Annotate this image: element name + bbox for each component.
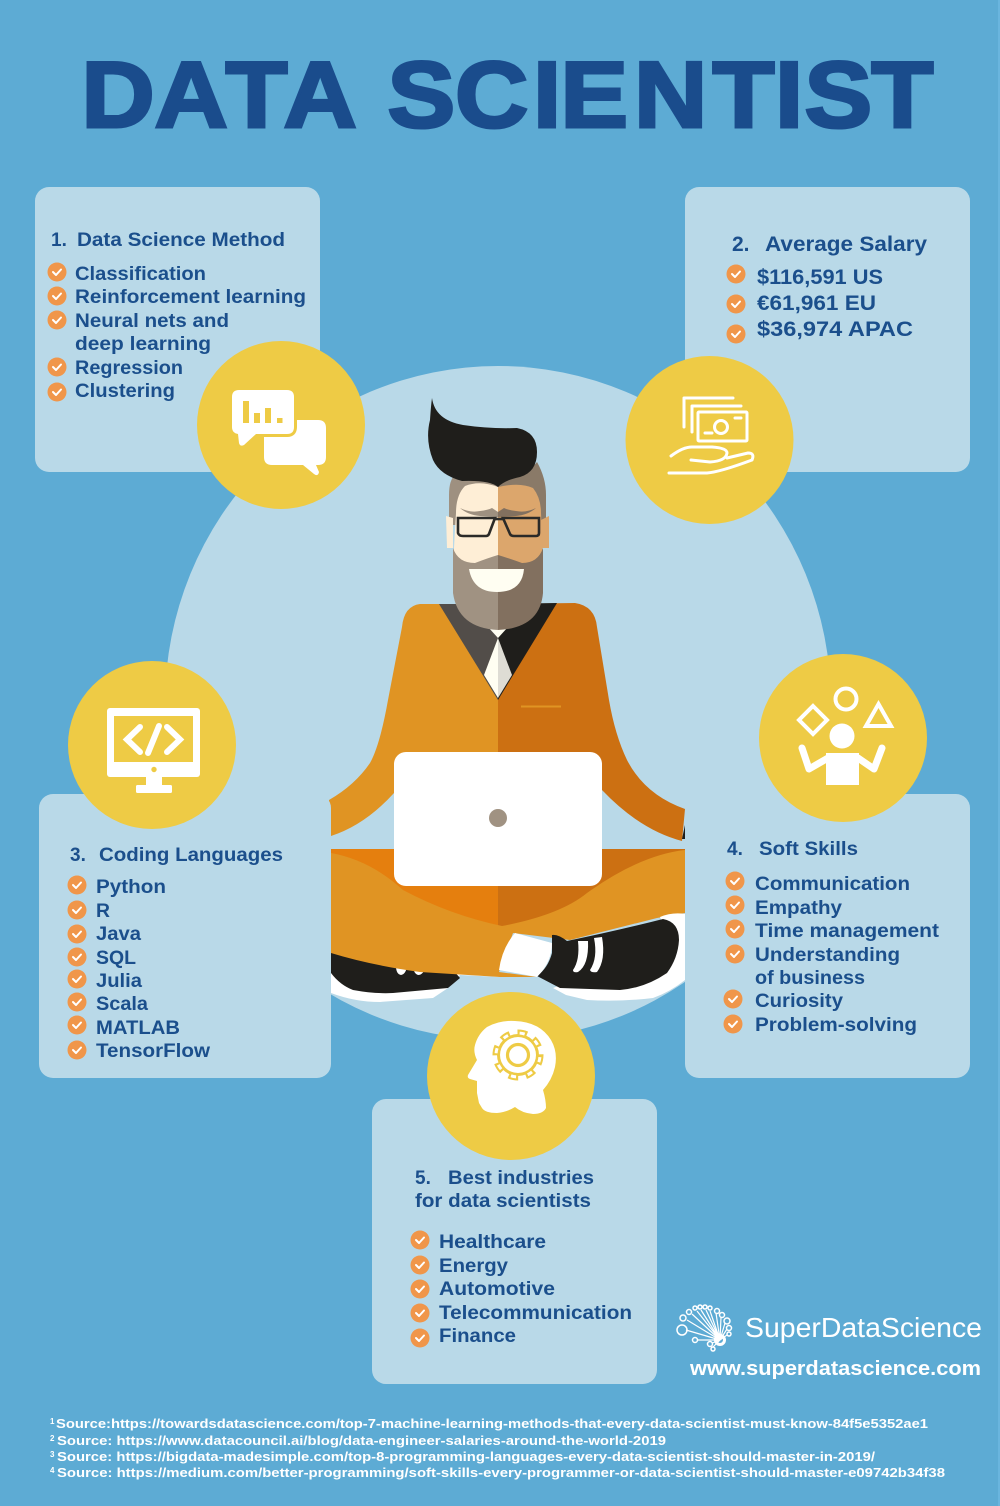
panel: soft skills: Communication xyxy=(755,874,910,895)
footnotes: sources: Source: https://www.datacouncil.ai/blog/data-engineer-salaries-around-the-world-2019 xyxy=(57,1433,666,1448)
footnotes: sources: Source:https://towardsdatascience.com/top-7-machine-learning-methods-that-every-data-scientist-must-know-84f5e5352ae1 xyxy=(56,1416,928,1431)
icon: chat bubbles with bar chart xyxy=(197,341,365,509)
panel: soft skills: of business xyxy=(755,968,865,989)
panel: soft skills: 4. xyxy=(727,839,743,860)
panel: average salary: €61,961 EU xyxy=(757,292,876,315)
panel: best industries: Energy xyxy=(439,1256,508,1277)
panel: data science method: Regression xyxy=(75,358,183,379)
panel: data science method: 1. xyxy=(51,230,67,251)
panel: coding languages: 3. xyxy=(70,845,86,866)
panel: data science method: Data Science Method xyxy=(77,230,285,251)
footnotes: sources: 1 xyxy=(50,1417,55,1426)
panel: soft skills: Curiosity xyxy=(755,991,843,1012)
panel: coding languages: SQL xyxy=(96,948,136,969)
icon: head with gear xyxy=(427,992,595,1160)
icon: monitor with code xyxy=(68,661,236,829)
title: DATA SCIENTIST xyxy=(81,41,933,147)
panel: soft skills: Understanding xyxy=(755,945,900,966)
panel: best industries: 5. xyxy=(415,1168,431,1189)
panel: coding languages: Java xyxy=(96,924,141,945)
panel: soft skills: Empathy xyxy=(755,898,842,919)
footnotes: sources xyxy=(50,1416,945,1480)
panel: best industries: Finance xyxy=(439,1326,516,1347)
panel: average salary: 2. xyxy=(732,233,750,256)
panel: average salary: $116,591 US xyxy=(757,266,883,289)
panel: coding languages: Coding Languages xyxy=(99,845,283,866)
panel: coding languages: Scala xyxy=(96,994,148,1015)
icon: hand holding money xyxy=(626,356,794,524)
panel: coding languages: Julia xyxy=(96,971,142,992)
footnotes: sources: Source: https://bigdata-madesimple.com/top-8-programming-languages-every-data-scientist-should-master-in-2019/ xyxy=(57,1449,875,1464)
central light circle xyxy=(165,366,831,1040)
panel: average salary xyxy=(685,187,970,472)
footnotes: sources: 4 xyxy=(50,1466,55,1475)
footnotes: sources: 3 xyxy=(50,1450,55,1459)
panel: data science method xyxy=(35,187,320,472)
logo: SuperDataScience: www.superdatascience.com xyxy=(689,1358,981,1380)
panel: coding languages: MATLAB xyxy=(96,1018,180,1039)
panel: soft skills xyxy=(685,794,970,1078)
panel: best industries: Telecommunication xyxy=(439,1303,632,1324)
panel: best industries: Automotive xyxy=(439,1279,555,1300)
panel: best industries: Healthcare xyxy=(439,1232,546,1253)
icon: person juggling shapes xyxy=(759,654,927,822)
panel: soft skills: Time management xyxy=(755,921,940,942)
panel: best industries xyxy=(372,1099,657,1384)
panel: coding languages: TensorFlow xyxy=(96,1041,210,1062)
footnotes: sources: 2 xyxy=(50,1434,55,1443)
panel: best industries: Best industries xyxy=(448,1168,594,1189)
panel: data science method: Neural nets and xyxy=(75,311,229,332)
illustration: data scientist figure xyxy=(329,398,685,1002)
panel: coding languages: R xyxy=(96,901,110,922)
panel: best industries: for data scientists xyxy=(415,1191,591,1212)
panel: coding languages xyxy=(39,794,331,1078)
panel: average salary: Average Salary xyxy=(765,233,927,256)
panel: coding languages: Python xyxy=(96,877,166,898)
panel: data science method: Clustering xyxy=(75,381,175,402)
footnotes: sources: Source: https://medium.com/better-programming/soft-skills-every-programmer-or-data-scientist-should-master-e09742b34f38 xyxy=(57,1465,945,1480)
logo: SuperDataScience: SuperDataScience xyxy=(745,1312,982,1343)
panel: data science method: deep learning xyxy=(75,334,211,355)
panel: average salary: $36,974 APAC xyxy=(757,318,913,341)
logo: SuperDataScience xyxy=(677,1305,982,1380)
panel: soft skills: Problem-solving xyxy=(755,1015,917,1036)
panel: soft skills: Soft Skills xyxy=(759,839,858,860)
panel: data science method: Classification xyxy=(75,264,206,285)
panel: data science method: Reinforcement learning xyxy=(75,287,306,308)
